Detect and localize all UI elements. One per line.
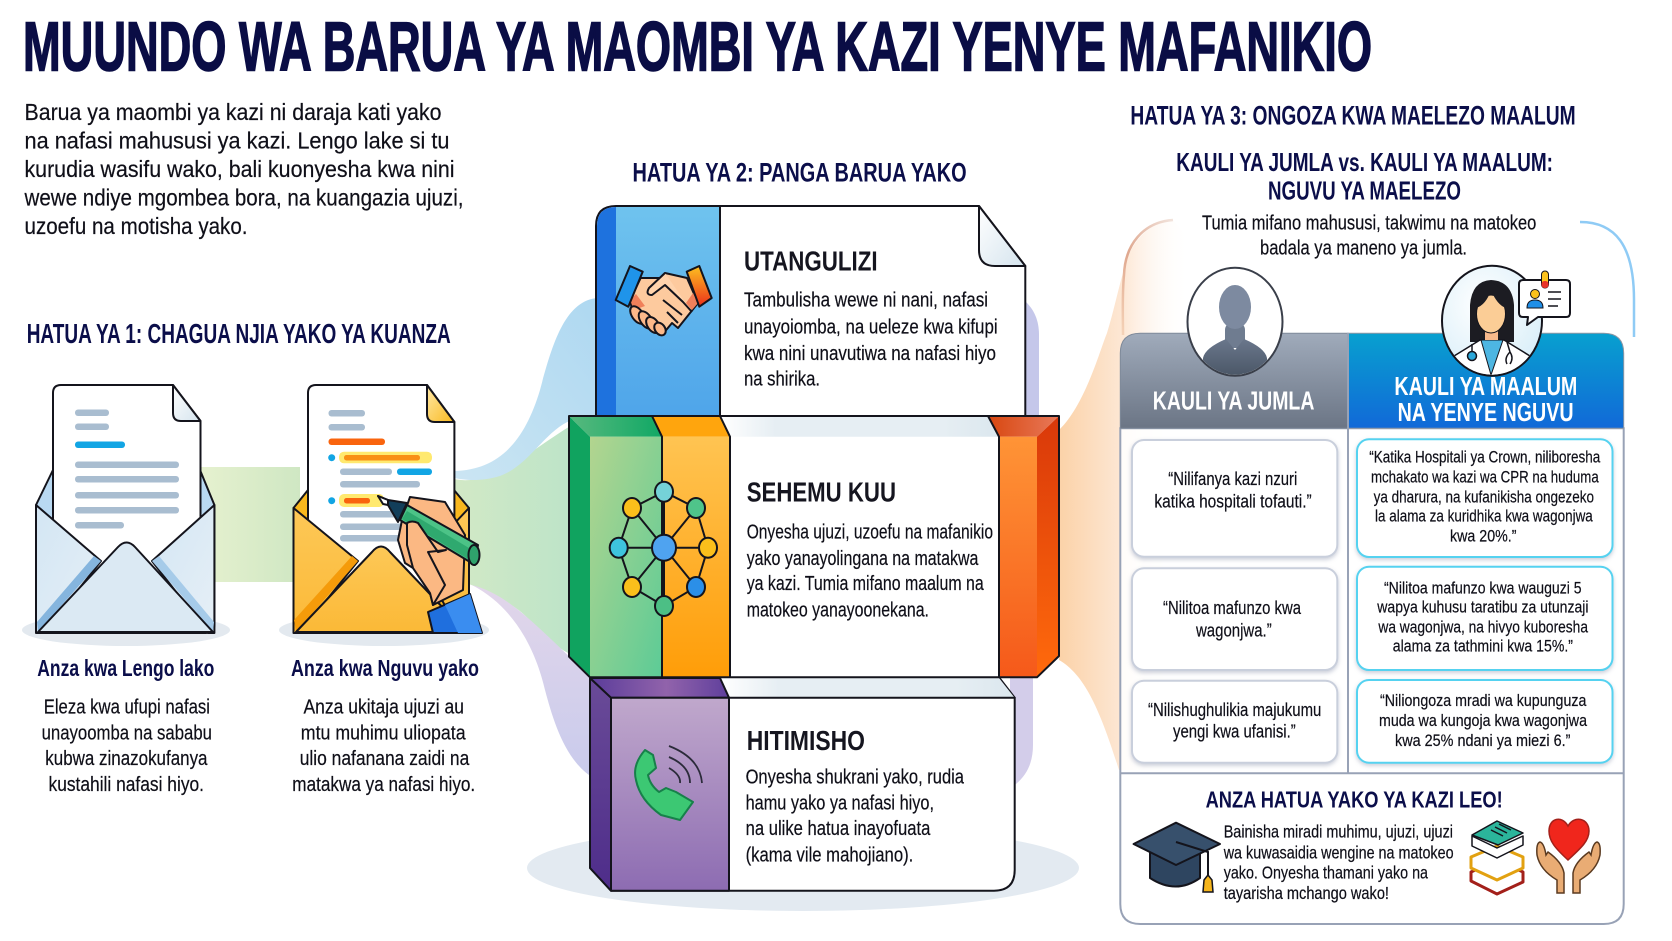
- pedestal shadow: [527, 825, 1079, 911]
- caption: start with strength: mtu muhimu uliopata: [301, 722, 466, 744]
- call to action: [1206, 786, 1503, 903]
- specific statement 1: kwa 20%.”: [1450, 527, 1517, 546]
- intro text: Barua ya maombi ya kazi ni daraja kati yako: [24, 99, 442, 125]
- header: general statement: [1120, 333, 1348, 428]
- caption: start with goal: kubwa zinazokufanya: [45, 748, 208, 770]
- caption: start with goal: Eleza kwa ufupi nafasi: [44, 696, 210, 718]
- step 1 heading: HATUA YA 1: CHAGUA NJIA YAKO YA KUANZA: [27, 318, 451, 349]
- header: general statement: KAULI YA JUMLA: [1153, 385, 1315, 415]
- panel: introduction card: [596, 206, 1025, 416]
- general statement 2: “Nilitoa mafunzo kwa: [1163, 597, 1302, 618]
- specific statement 2: alama za tathmini kwa 15%.”: [1393, 637, 1573, 656]
- general statement 1: katika hospitali tofauti.”: [1154, 491, 1312, 512]
- card text: kwa nini unavutiwa na nafasi hiyo: [744, 343, 996, 365]
- caption: start with strength: Anza ukitaja ujuzi au: [304, 696, 464, 718]
- caption: start with strength: Anza kwa Nguvu yako: [291, 655, 479, 681]
- header: specific statement: KAULI YA MAALUM: [1394, 371, 1577, 401]
- general statement 1: [1132, 440, 1337, 557]
- card text: [747, 477, 993, 622]
- comparison heading: NGUVU YA MAELEZO: [1268, 175, 1461, 205]
- card text: UTANGULIZI: [744, 246, 878, 277]
- specific statement 1: ya dharura, na kufanikisha ongezeko: [1374, 487, 1594, 506]
- icon: anonymous person: [1188, 268, 1282, 380]
- caption: start with goal: unayoomba na sababu: [42, 722, 212, 744]
- specific statement 3: kwa 25% ndani ya miezi 6.”: [1395, 731, 1571, 750]
- card text: ya kazi. Tumia mifano maalum na: [747, 573, 984, 595]
- flow ribbons behind the three steps: [200, 220, 1634, 787]
- specific statement 3: muda wa kungoja kwa wagonjwa: [1379, 711, 1587, 730]
- comparison intro: Tumia mifano mahususi, takwimu na matokeo: [1202, 212, 1536, 234]
- icon: handshake: [616, 266, 712, 338]
- general statement 3: [1132, 681, 1337, 763]
- intro text: kurudia wasifu wako, bali kuonyesha kwa nini: [24, 156, 454, 182]
- specific statement 1: “Katika Hospitali ya Crown, niliboresha: [1369, 448, 1601, 467]
- icon: hand holding marker: [378, 496, 482, 633]
- specific statement 1: mchakato wa kazi wa CPR na huduma: [1371, 468, 1599, 487]
- header: specific statement: NA YENYE NGUVU: [1398, 397, 1574, 427]
- panel: main body card: [569, 416, 1059, 677]
- card text: [744, 246, 998, 391]
- caption: start with strength: ulio nafanana zaidi na: [300, 748, 470, 770]
- header: specific statement: [1348, 333, 1624, 428]
- card text: HITIMISHO: [747, 725, 865, 756]
- general statement 3: yengi kwa ufanisi.”: [1173, 721, 1296, 742]
- card text: hamu yako ya nafasi hiyo,: [746, 792, 934, 814]
- intro text: wewe ndiye mgombea bora, na kuangazia ujuzi,: [24, 184, 464, 210]
- call to action: wa kuwasaidia wengine na matokeo: [1223, 842, 1454, 862]
- specific statement 3: “Niliongoza mradi wa kupunguza: [1380, 691, 1587, 710]
- specific statement 2: wapya kuhusu taratibu za utunzaji: [1376, 598, 1588, 617]
- intro text: uzoefu na motisha yako.: [24, 213, 248, 239]
- call to action: tayarisha mchango wako!: [1224, 883, 1389, 903]
- specific statement 1: la alama za kuridhika kwa wagonjwa: [1375, 507, 1593, 526]
- card text: na ulike hatua inayofuata: [746, 818, 931, 840]
- comparison intro: badala ya maneno ya jumla.: [1260, 237, 1467, 259]
- card text: Onyesha shukrani yako, rudia: [746, 766, 965, 788]
- card text: SEHEMU KUU: [747, 477, 896, 508]
- icon: network: [610, 482, 717, 616]
- call to action: Bainisha miradi muhimu, ujuzi, ujuzi: [1224, 821, 1453, 841]
- general statement 1: “Nilifanya kazi nzuri: [1168, 468, 1297, 489]
- specific statement 2: “Nilitoa mafunzo kwa wauguzi 5: [1384, 578, 1582, 597]
- card text: (kama vile mahojiano).: [746, 845, 913, 867]
- caption: start with strength: matakwa ya nafasi hiyo.: [292, 774, 475, 796]
- caption: start with goal: Anza kwa Lengo lako: [37, 655, 214, 681]
- card text: na shirika.: [744, 369, 820, 391]
- card text: [746, 725, 965, 867]
- card text: yako yanayolingana na matakwa: [747, 548, 979, 570]
- icon: envelope with plain letter: [22, 385, 230, 646]
- general statement 2: wagonjwa.”: [1195, 620, 1272, 641]
- intro text: [24, 99, 464, 239]
- specific statement 2: wa wagonjwa, na hivyo kuboresha: [1378, 617, 1588, 636]
- icon: phone: [635, 746, 702, 820]
- comparison heading: [1176, 147, 1553, 205]
- general statement 3: “Nilishughulikia majukumu: [1148, 699, 1321, 720]
- intro text: na nafasi mahususi ya kazi. Lengo lake si tu: [24, 128, 450, 154]
- card text: Onyesha ujuzi, uzoefu na mafanikio: [747, 521, 993, 543]
- caption: start with goal: kustahili nafasi hiyo.: [48, 774, 204, 796]
- call to action: ANZA HATUA YAKO YA KAZI LEO!: [1206, 786, 1503, 812]
- panel: comparison table: [1120, 266, 1624, 924]
- call to action: yako. Onyesha thamani yako na: [1224, 863, 1428, 883]
- specific statement 1: [1357, 439, 1612, 557]
- card text: Tambulisha wewe ni nani, nafasi: [744, 290, 988, 312]
- panel: conclusion card: [590, 677, 1015, 891]
- icon: yellow envelope with highlighted letter and hand: [279, 385, 489, 646]
- icon: graduation cap: [1134, 823, 1220, 892]
- card text: unayoiomba, na ueleze kwa kifupi: [744, 316, 998, 338]
- caption: start with strength: [291, 655, 479, 796]
- icon: doctor with id card: [1442, 266, 1570, 380]
- specific statement 3: [1357, 680, 1612, 763]
- step 2 heading: HATUA YA 2: PANGA BARUA YAKO: [632, 158, 967, 188]
- icon: stacked books: [1471, 821, 1523, 894]
- comparison intro: [1202, 212, 1536, 259]
- icon: hands and heart: [1537, 819, 1600, 893]
- card text: matokeo yanayoonekana.: [747, 600, 929, 622]
- caption: start with goal: [37, 655, 214, 796]
- general statement 2: [1132, 568, 1337, 670]
- specific statement 2: [1357, 567, 1612, 670]
